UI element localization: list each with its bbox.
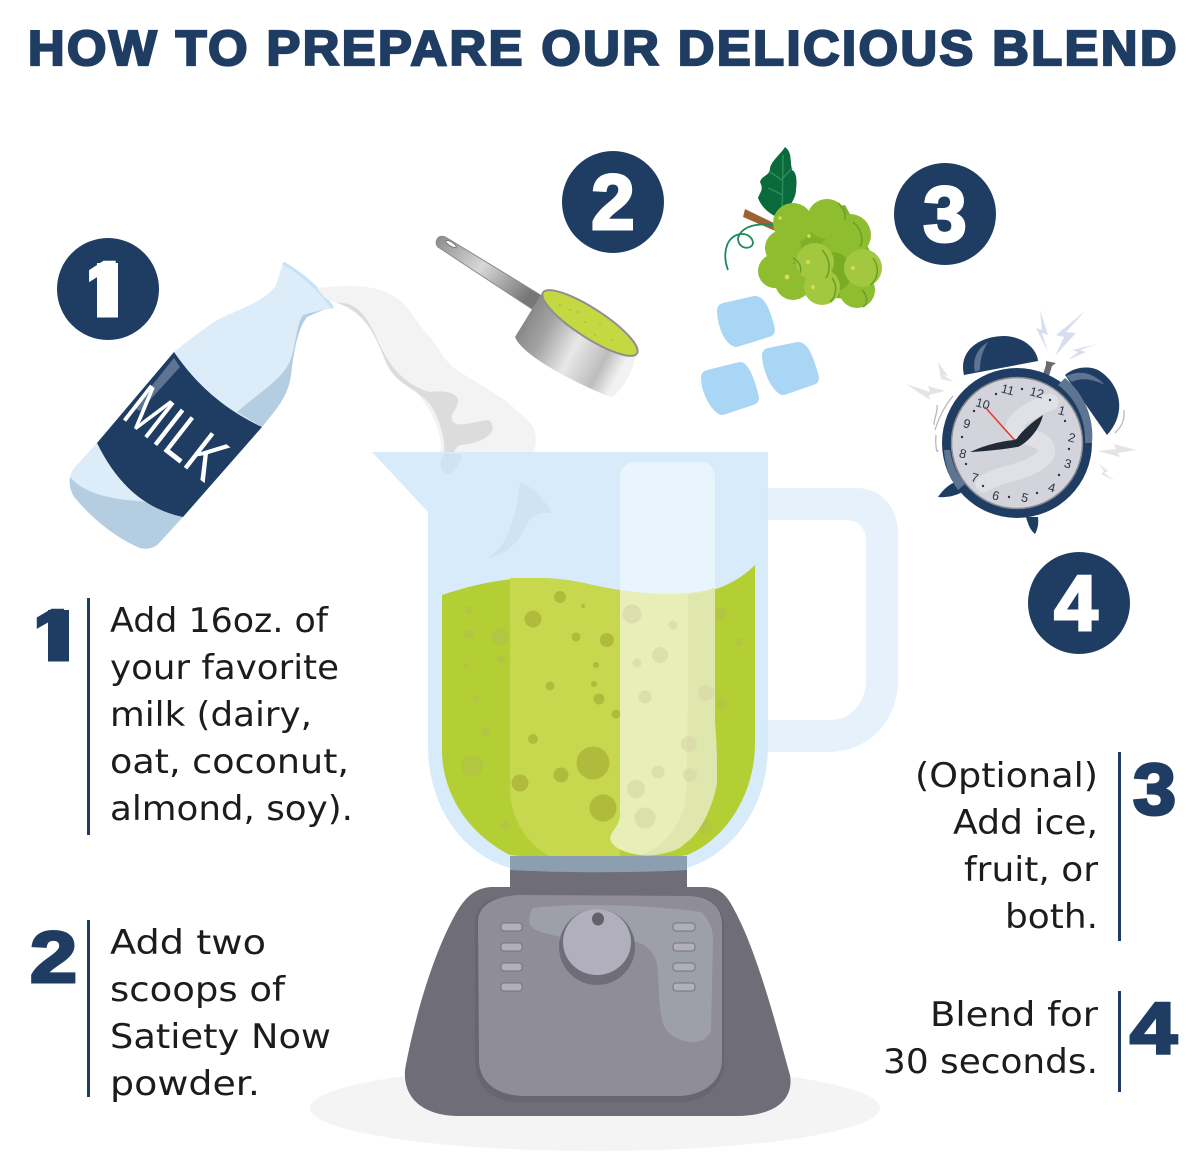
clock numerals: 2 — [1067, 430, 1077, 446]
dial — [559, 909, 635, 985]
step 2 text: 2 — [30, 918, 77, 998]
case — [942, 368, 1092, 518]
blender jug — [372, 452, 768, 868]
blender shadow — [310, 1065, 880, 1151]
step 3 text: (Optional) — [915, 756, 1098, 796]
step 4 text — [883, 989, 1177, 1092]
blender jug handle — [760, 488, 898, 752]
number badge 3 — [894, 163, 996, 265]
feet — [938, 480, 966, 497]
clock face — [952, 378, 1082, 508]
step 3 text: both. — [1005, 897, 1098, 937]
smoothie highlight — [510, 578, 620, 859]
number badge 3: 3 — [923, 170, 967, 258]
number badge 1: 1 — [85, 245, 129, 333]
step 1 text: Add 16oz. of — [110, 601, 329, 641]
clock numerals: 1 — [1057, 403, 1067, 419]
clock numerals: 4 — [1047, 480, 1057, 496]
panel highlight — [529, 905, 713, 1042]
bells — [963, 336, 1038, 375]
clock hands — [970, 440, 1017, 452]
clock numerals — [958, 382, 1077, 506]
step 2 text: Add two — [110, 923, 266, 963]
step 1 text: your favorite — [110, 648, 339, 688]
step 2 text: powder. — [110, 1064, 260, 1104]
step 2 text: Satiety Now — [110, 1017, 331, 1057]
clock numerals: 11 — [1000, 382, 1016, 398]
number badge 2 — [562, 151, 664, 253]
milk bottle illustration: MILK — [111, 371, 241, 495]
number badge 4 — [1028, 552, 1130, 654]
step 1 text — [28, 596, 353, 835]
clock numerals: 6 — [991, 488, 1001, 504]
smoothie — [442, 565, 755, 859]
motor housing — [405, 887, 791, 1116]
right buttons — [673, 923, 695, 991]
milk stream — [317, 286, 536, 456]
jug collar — [510, 856, 687, 894]
step 1 text: almond, soy). — [110, 789, 353, 829]
clock numerals: 7 — [970, 470, 980, 486]
vine stem — [743, 209, 782, 233]
left buttons — [501, 923, 522, 991]
step 1 text: oat, coconut, — [110, 742, 349, 782]
clock ticks — [961, 388, 1070, 498]
control panel — [475, 896, 724, 1102]
step 2 text — [30, 918, 331, 1104]
clock numerals: 8 — [958, 446, 968, 462]
ice cubes — [708, 303, 812, 408]
alarm clock — [906, 310, 1136, 534]
grapes — [725, 147, 882, 308]
title: HOW TO PREPARE OUR DELICIOUS BLEND — [28, 22, 1179, 76]
tendril — [725, 224, 780, 270]
measuring scoop — [436, 236, 645, 397]
clock numerals: 5 — [1020, 490, 1030, 506]
number badge 1 — [57, 238, 159, 340]
step 4 text: 30 seconds. — [883, 1042, 1098, 1082]
bubbles — [512, 591, 620, 822]
vibration lines — [934, 396, 1124, 451]
lightning bolts — [1036, 310, 1098, 360]
faint milk inside jug — [441, 454, 552, 558]
step 4 text: 4 — [1130, 989, 1177, 1069]
grape cluster — [758, 199, 882, 308]
step 3 text: Add ice, — [953, 803, 1098, 843]
number badge 2: 2 — [591, 158, 635, 246]
step 2 text: scoops of — [110, 970, 286, 1010]
step 3 text — [915, 750, 1176, 941]
number badge 4: 4 — [1054, 559, 1098, 647]
blender base — [405, 856, 791, 1116]
leaf — [758, 147, 797, 228]
clock numerals: 9 — [962, 416, 972, 432]
step 1 text: milk (dairy, — [110, 695, 312, 735]
step 1 text: 1 — [33, 596, 77, 676]
clock numerals: 10 — [974, 395, 991, 413]
step 4 text: Blend for — [930, 995, 1098, 1035]
milk bottle illustration — [70, 263, 333, 549]
light reflection — [620, 462, 715, 594]
step 3 text: 3 — [1133, 750, 1176, 830]
clock numerals: 3 — [1063, 456, 1073, 472]
step 3 text: fruit, or — [964, 850, 1098, 890]
clock numerals: 12 — [1028, 384, 1045, 402]
winder — [1043, 361, 1056, 376]
